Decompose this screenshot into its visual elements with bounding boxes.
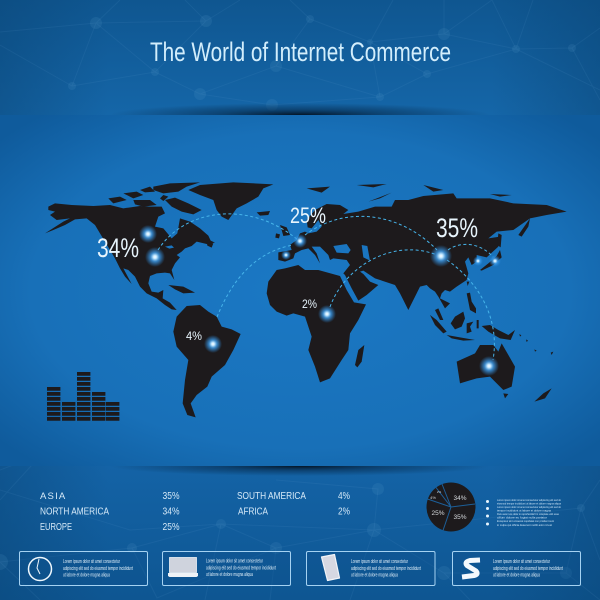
panel: laptop: ut labore et dolore magna aliqua xyxy=(206,572,253,578)
japan xyxy=(480,250,502,271)
panel: tablet: ut labore et dolore magna aliqua xyxy=(351,572,398,578)
equalizer bar icon xyxy=(47,372,119,421)
panel: dollar: ut labore et dolore magna aliqua xyxy=(493,572,540,578)
southeast asia islands xyxy=(430,282,553,355)
panel: laptop xyxy=(162,552,290,586)
pie chart: 25% xyxy=(431,510,445,517)
pie chart: 34% xyxy=(453,495,467,502)
panel: clock: Lorem ipsum dolor sit amet consectetur xyxy=(63,559,120,565)
legend table: 34% xyxy=(162,506,180,518)
legend table xyxy=(40,490,350,533)
legend table: 4% xyxy=(338,490,350,502)
pie chart xyxy=(426,482,476,532)
inland seas xyxy=(333,244,370,261)
panel: tablet: adipiscing elit sed do eiusmod tempor incididunt xyxy=(351,566,421,572)
panel: laptop: Lorem ipsum dolor sit amet consectetur xyxy=(206,558,263,564)
pie legend bullets and notes: Duis aute irure dolor in reprehenderit in voluptate velit esse xyxy=(497,512,560,516)
legend table: NORTH AMERICA xyxy=(40,506,109,518)
panel: clock xyxy=(20,552,148,586)
pie chart: 35% xyxy=(453,514,467,521)
madagascar xyxy=(355,345,364,367)
pie legend bullets and notes: Lorem ipsum dolor sit amet consectetur adipiscing elit sed do xyxy=(497,505,562,509)
legend table: 2% xyxy=(338,506,350,518)
panel: laptop: adipiscing elit sed do eiusmod tempor incididunt xyxy=(206,566,276,572)
percentage labels xyxy=(97,203,478,343)
british isles and small northern islands xyxy=(275,184,530,247)
percentage labels: 34% xyxy=(97,233,139,263)
percentage labels: 25% xyxy=(290,203,326,228)
americas xyxy=(45,203,241,417)
pie legend bullets and notes: eiusmod tempor incididunt ut labore et dolore magna aliqua xyxy=(497,502,562,506)
legend table: ASIA xyxy=(40,491,66,502)
australia xyxy=(457,343,515,390)
icon: tablet xyxy=(322,554,340,580)
legend table: AFRICA xyxy=(238,506,268,518)
icon: clock xyxy=(28,558,52,580)
eurasia xyxy=(278,193,567,310)
percentage labels: 2% xyxy=(302,297,317,311)
greenland and arctic islands xyxy=(108,182,273,248)
panel: dollar: adipiscing elit sed do eiusmod tempor incididunt xyxy=(493,566,563,572)
pie legend bullets and notes: Excepteur sint occaecat cupidatat non proident sunt xyxy=(497,519,554,523)
location glows xyxy=(139,225,501,376)
pie legend bullets and notes: cillum dolore eu fugiat nulla pariatur xyxy=(497,516,547,520)
pie legend bullets and notes: tempor incididunt ut labore et dolore magna xyxy=(497,508,552,512)
pie chart: 2% xyxy=(437,490,441,494)
icon: dollar sign xyxy=(462,560,480,577)
pie chart: 4% xyxy=(430,495,436,500)
pie legend bullets and notes xyxy=(486,498,562,527)
pie legend bullets and notes: Lorem ipsum dolor sit amet consectetur adipiscing elit sed do xyxy=(497,498,562,502)
legend table: 25% xyxy=(162,521,180,533)
panel: clock: adipiscing elit sed do eiusmod tempor incididunt xyxy=(63,566,133,572)
world map xyxy=(45,182,567,417)
africa xyxy=(267,184,567,402)
panel: clock: ut labore et dolore magna aliqua xyxy=(63,572,110,578)
panel: dollar xyxy=(452,552,580,586)
percentage labels: 35% xyxy=(436,213,478,243)
legend table: 35% xyxy=(162,490,180,502)
title: The World of Internet Commerce xyxy=(150,37,451,67)
panel: tablet: Lorem ipsum dolor sit amet consectetur xyxy=(351,559,408,565)
legend table: EUROPE xyxy=(40,521,72,533)
percentage labels: 4% xyxy=(186,329,202,343)
panel: tablet xyxy=(306,552,435,586)
map background band xyxy=(0,115,600,466)
connection arcs xyxy=(158,214,494,360)
icon: laptop xyxy=(168,558,198,577)
panel: dollar: Lorem ipsum dolor sit amet consectetur xyxy=(493,559,550,565)
pie legend bullets and notes: in culpa qui officia deserunt mollit anim id est xyxy=(497,523,552,527)
legend table: SOUTH AMERICA xyxy=(237,490,306,502)
